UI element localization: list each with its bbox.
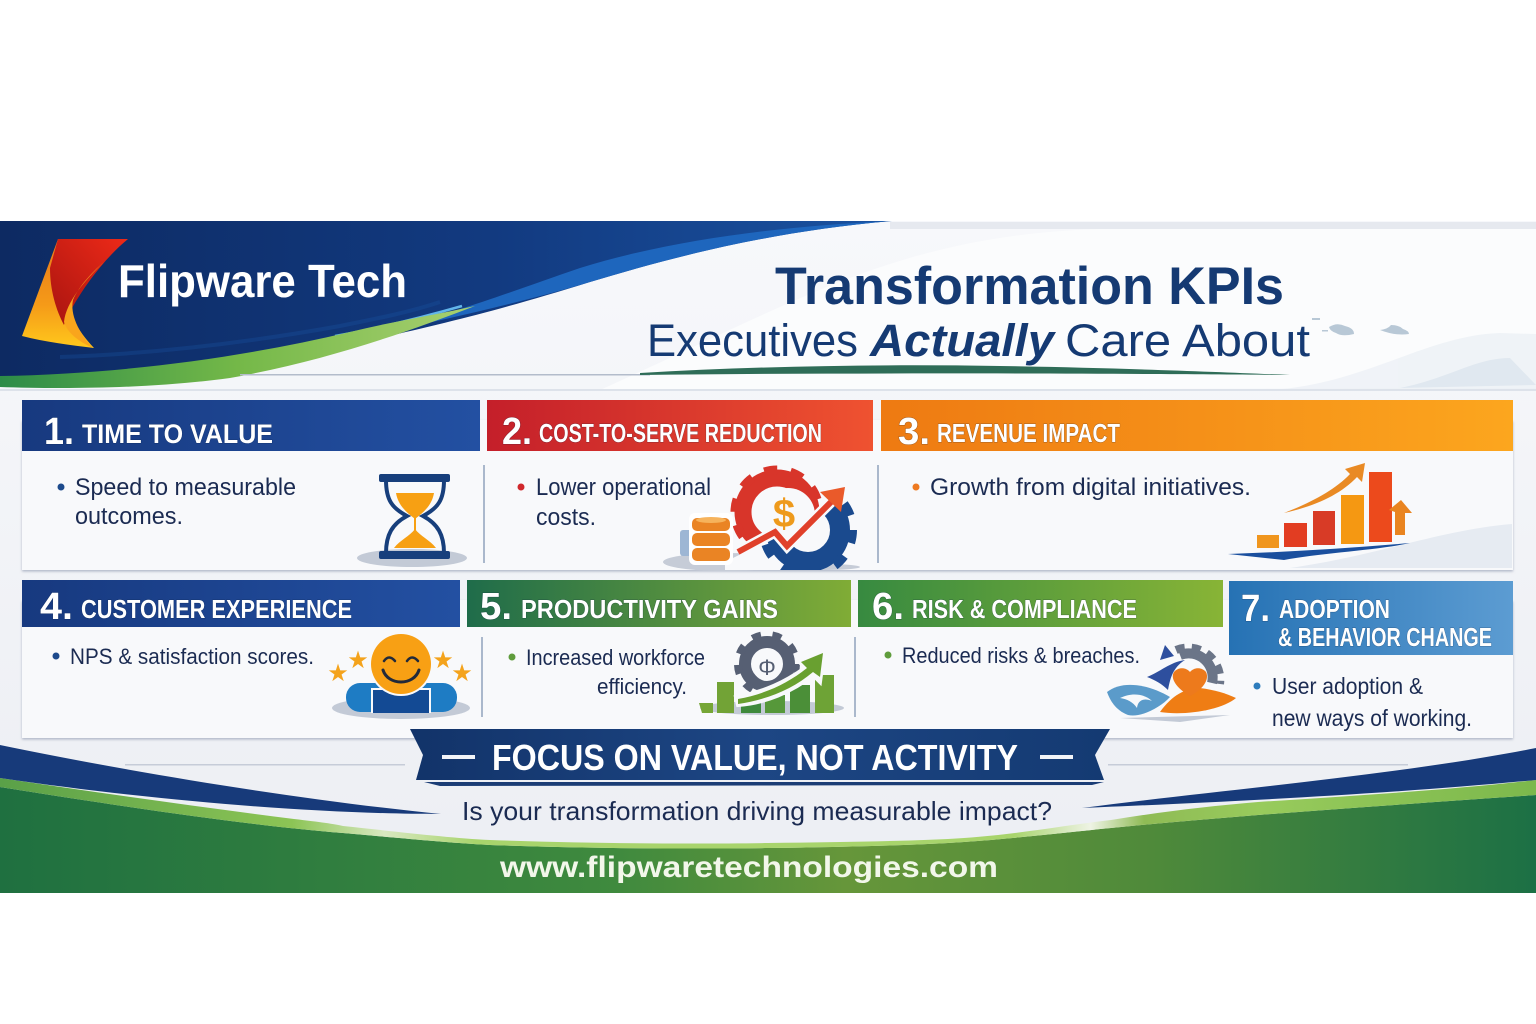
title	[647, 257, 1311, 366]
text block 1: outcomes.	[75, 503, 183, 530]
heading 2: 2.	[502, 411, 532, 453]
panel: 3 revenue impact	[881, 400, 1513, 560]
callout banner: FOCUS ON VALUE, NOT ACTIVITY	[492, 737, 1018, 778]
text block 5	[508, 645, 705, 699]
icon: clouds	[1312, 318, 1409, 335]
heading 3: REVENUE IMPACT	[937, 418, 1120, 448]
footer right blue wedge	[1082, 748, 1536, 808]
title line 2: Actually	[869, 315, 1056, 366]
text block 1: Speed to measurable	[75, 474, 296, 501]
icon: gear and growth bars	[699, 635, 844, 715]
panel: 5 productivity gains	[467, 580, 851, 715]
logo wordmark: Flipware Tech	[118, 255, 407, 307]
red gear	[735, 470, 819, 554]
heading 2: COST-TO-SERVE REDUCTION	[539, 418, 822, 448]
page background band	[0, 221, 1536, 893]
logo yellow stripe	[64, 262, 104, 348]
heading 7	[1229, 581, 1513, 655]
logo red blade	[50, 239, 128, 325]
header lighter blue stripe	[60, 302, 440, 357]
icon: smiling customer with stars	[327, 632, 473, 719]
question text: Is your transformation driving measurable impact?	[462, 796, 1052, 826]
footer swoosh	[0, 745, 1536, 893]
heading 5	[467, 580, 851, 628]
text block 2	[518, 474, 711, 531]
panel: 6 risk and compliance	[858, 580, 1236, 722]
header cyan highlight	[335, 306, 462, 336]
text block 1	[58, 474, 296, 530]
text block 3: Growth from digital initiatives.	[930, 474, 1251, 501]
icon: smiling customer with stars: ★	[347, 647, 369, 674]
text block 7	[1254, 673, 1472, 731]
heading 5: 5.	[480, 586, 512, 628]
footer green body	[0, 787, 1536, 893]
icon: rising bar chart	[1228, 463, 1412, 560]
heading 7: 7.	[1241, 588, 1270, 630]
title line 2: Care About	[1065, 315, 1311, 366]
header lower divider	[0, 389, 1536, 391]
text block 5: efficiency.	[597, 674, 687, 699]
header white sweep	[600, 229, 1536, 390]
text block 2: Lower operational	[536, 474, 711, 501]
heading 1	[22, 400, 480, 453]
heading 6: 6.	[872, 586, 904, 628]
text block 6: Reduced risks & breaches.	[902, 643, 1140, 668]
header light stripe	[890, 222, 1536, 229]
header banner	[0, 221, 1536, 391]
header green swoosh	[0, 306, 475, 388]
divider	[481, 637, 483, 717]
panel: 1 time to value	[22, 400, 480, 567]
icon: smiling customer with stars: ★	[451, 660, 473, 687]
icon: hourglass	[357, 474, 467, 567]
text block 5: Increased workforce	[526, 645, 705, 670]
arrow	[738, 495, 838, 552]
panel: 4 customer experience	[22, 580, 473, 719]
icon: smiling customer with stars: ★	[327, 660, 349, 687]
coins	[689, 513, 733, 565]
heading 4	[22, 580, 460, 628]
thin rules beside banner	[125, 764, 1408, 766]
panel: 7 adoption and behavior change	[1229, 581, 1513, 731]
card 3 corner wave	[1290, 524, 1512, 568]
heading 6: RISK & COMPLIANCE	[912, 594, 1137, 624]
icon: gears, coins and arrow: $	[773, 492, 795, 536]
blue gear	[762, 501, 857, 570]
heading 1: TIME TO VALUE	[82, 419, 273, 449]
logo orange blade	[22, 239, 94, 348]
footer light green edge	[0, 778, 1536, 849]
icon: shield, gear and person	[1107, 645, 1236, 722]
text block 2: costs.	[536, 504, 596, 531]
callout banner	[410, 729, 1110, 786]
heading 3	[881, 400, 1513, 453]
text block 7: new ways of working.	[1272, 705, 1472, 731]
header green underline	[640, 365, 1290, 375]
heading 5: PRODUCTIVITY GAINS	[521, 594, 778, 624]
divider	[483, 465, 485, 563]
divider	[877, 465, 879, 563]
title line 2	[647, 315, 1311, 366]
icon: smiling customer with stars: ★	[432, 647, 454, 674]
footer left blue wedge	[0, 745, 441, 814]
panel: row 1 card	[22, 420, 1513, 570]
logo	[22, 239, 407, 348]
heading 4: CUSTOMER EXPERIENCE	[81, 594, 352, 624]
heading 6	[858, 580, 1223, 628]
text block 7: User adoption &	[1272, 673, 1423, 699]
panel: 2 cost-to-serve reduction	[487, 400, 873, 574]
title line 2: Executives	[647, 315, 858, 366]
mask below arrow	[725, 497, 870, 570]
header blue swoosh	[0, 221, 892, 378]
heading 1: 1.	[44, 411, 74, 453]
panel: row 2 card	[22, 600, 1513, 738]
text block 4: NPS & satisfaction scores.	[70, 644, 314, 669]
divider	[854, 637, 856, 717]
icon: gear and growth bars: Φ	[758, 655, 776, 680]
icon: gears, coins and arrow	[663, 470, 870, 574]
heading 7: ADOPTION	[1279, 594, 1390, 624]
heading 4: 4.	[40, 586, 73, 628]
heading 2	[487, 400, 873, 453]
header wave: right	[1283, 333, 1536, 389]
footer url: www.flipwaretechnologies.com	[499, 851, 998, 884]
header rule line	[240, 374, 650, 376]
title line 1: Transformation KPIs	[775, 257, 1284, 316]
header bright blue edge	[370, 221, 892, 336]
heading 3: 3.	[898, 411, 930, 453]
